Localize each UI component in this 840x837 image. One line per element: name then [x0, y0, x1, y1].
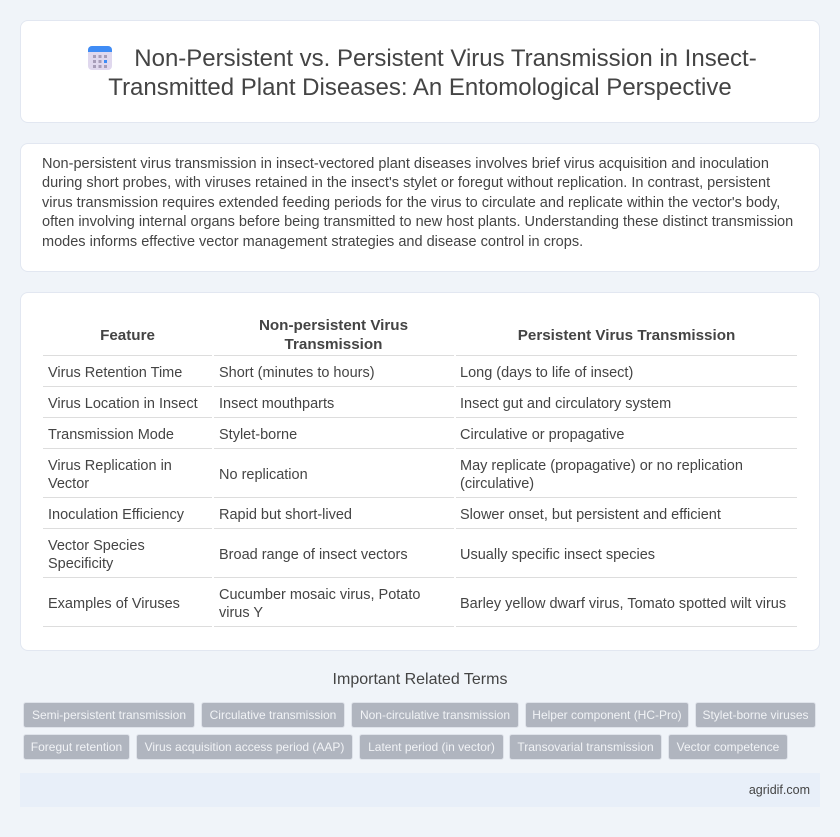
table row: replication	[48, 458, 743, 492]
tags: related terms: Circulative transmission	[210, 708, 336, 722]
table row: replication: Vector	[48, 476, 89, 492]
panel: introduction	[20, 143, 820, 272]
table header	[100, 317, 735, 353]
table row: retention time: Short (minutes to hours)	[219, 365, 375, 381]
table row: replication: Virus Replication in	[48, 458, 172, 474]
tags: related terms	[23, 702, 816, 760]
text block: introduction: virus transmission requires extended feeding periods for the virus to circulate and replicate within the vector's body,	[42, 195, 780, 211]
table row: transmission mode: Transmission Mode	[48, 427, 174, 443]
table row: virus location: Insect mouthparts	[219, 396, 334, 412]
table header: Transmission	[285, 336, 382, 353]
table row: replication: May replicate (propagative) or no replication	[460, 458, 743, 474]
table header: Feature	[100, 327, 155, 344]
table row: vector specificity: Broad range of insect vectors	[219, 547, 408, 563]
footer bar	[20, 773, 820, 807]
text block: introduction: often involving internal organs before being transmitted to new host plants. Understanding these distinct transmission	[42, 214, 793, 230]
icon: calendar	[88, 46, 112, 70]
tags: related terms: Transovarial transmission	[517, 740, 654, 754]
title	[108, 45, 757, 101]
table row: retention time: Virus Retention Time	[48, 365, 182, 381]
text block: introduction: Non-persistent virus transmission in insect-vectored plant diseases involves brief virus acquisition and inoculation	[42, 156, 769, 172]
text block: introduction: during short probes, with viruses retained in the insect's stylet or foregut without replication. In contrast, persistent	[42, 175, 770, 191]
text block: introduction	[42, 156, 793, 250]
title: Non-Persistent vs. Persistent Virus Transmission in Insect-	[134, 45, 757, 72]
table row: examples: Cucumber mosaic virus, Potato	[219, 587, 420, 603]
table row: retention time	[48, 365, 633, 381]
table row: virus location: Virus Location in Insect	[48, 396, 198, 412]
tags: related terms: Non-circulative transmission	[360, 708, 510, 722]
table row: inoculation efficiency	[48, 507, 721, 523]
table row: examples: Barley yellow dwarf virus, Tomato spotted wilt virus	[460, 596, 786, 612]
table row: inoculation efficiency: Rapid but short-lived	[219, 507, 352, 523]
table row: replication: No replication	[219, 467, 308, 483]
table row: vector specificity: Specificity	[48, 556, 113, 572]
tags: related terms: Virus acquisition access period (AAP)	[145, 740, 344, 754]
table row: inoculation efficiency: Inoculation Efficiency	[48, 507, 184, 523]
table row: vector specificity: Vector Species	[48, 538, 145, 554]
text block: introduction: modes informs effective vector management strategies and disease control in crops.	[42, 234, 583, 250]
tags: related terms: Vector competence	[677, 740, 779, 754]
table row: transmission mode: Stylet-borne	[219, 427, 297, 443]
table row: examples: virus Y	[219, 605, 263, 621]
footer source text: agridif.com	[749, 783, 810, 797]
tags: related terms: Latent period (in vector)	[368, 740, 495, 754]
table header: Persistent Virus Transmission	[518, 327, 735, 344]
table row: retention time: Long (days to life of insect)	[460, 365, 633, 381]
table row: inoculation efficiency: Slower onset, but persistent and efficient	[460, 507, 721, 523]
title: Transmitted Plant Diseases: An Entomological Perspective	[108, 74, 732, 101]
table row: virus location: Insect gut and circulatory system	[460, 396, 671, 412]
table row: vector specificity	[48, 538, 655, 572]
tags: related terms: Semi-persistent transmission	[32, 708, 186, 722]
table row: examples: Examples of Viruses	[48, 596, 180, 612]
panel: header	[20, 20, 820, 123]
table row: transmission mode	[48, 427, 624, 443]
heading: related terms: Important Related Terms	[333, 671, 507, 688]
table row: examples	[48, 587, 786, 621]
table row: replication: (circulative)	[460, 476, 534, 492]
table row: transmission mode: Circulative or propagative	[460, 427, 624, 443]
table row: vector specificity: Usually specific insect species	[460, 547, 655, 563]
tags: related terms: Foregut retention	[31, 740, 122, 754]
panel: comparison table	[20, 292, 820, 651]
tags: related terms: Helper component (HC-Pro)	[532, 708, 682, 722]
table row: virus location	[48, 396, 671, 412]
table header: Non-persistent Virus	[259, 317, 408, 334]
tags: related terms: Stylet-borne viruses	[702, 708, 809, 722]
